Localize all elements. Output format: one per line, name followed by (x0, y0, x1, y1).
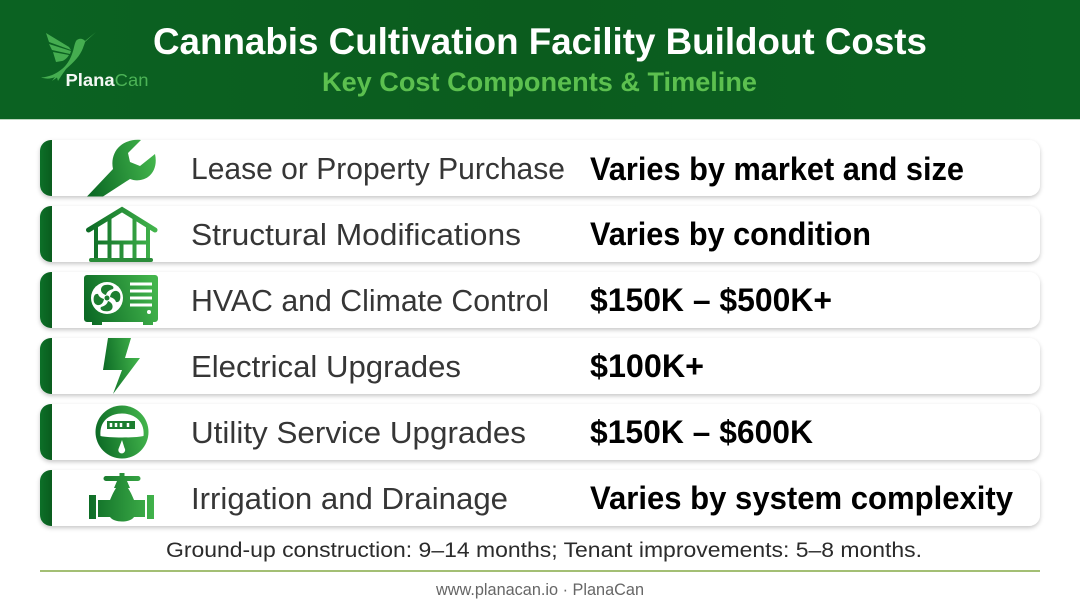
value: $150K – $500K+ (590, 282, 832, 318)
subtitle: Key Cost Components & Timeline (322, 67, 757, 97)
value: $150K – $600K (590, 414, 813, 450)
icon: lightning bolt (103, 338, 140, 394)
title: Cannabis Cultivation Facility Buildout Costs (153, 21, 927, 62)
label: HVAC and Climate Control (191, 283, 549, 318)
panel: utility (40, 404, 1040, 460)
icon: hvac unit (84, 275, 158, 325)
value: Varies by market and size (590, 151, 964, 187)
icon: hummingbird (41, 32, 96, 81)
panel: electrical (40, 338, 1040, 394)
icon: utility meter (96, 406, 148, 458)
timeline note: Ground-up construction: 9–14 months; Tenant improvements: 5–8 months. (166, 538, 922, 562)
label: Structural Modifications (191, 217, 521, 252)
panel: hvac (40, 272, 1040, 328)
label: Irrigation and Drainage (191, 481, 508, 516)
icon: wrench (87, 140, 156, 196)
value: Varies by system complexity (590, 480, 1013, 516)
label: Electrical Upgrades (191, 349, 461, 384)
logo (41, 32, 148, 90)
wordmark: PlanaCan (66, 70, 148, 90)
panel: lease or property purchase (40, 140, 1040, 196)
footer: www.planacan.io · PlanaCan (435, 581, 644, 599)
value: Varies by condition (590, 216, 871, 252)
value: $100K+ (590, 348, 704, 384)
panel: structural modifications (40, 206, 1040, 262)
label: Lease or Property Purchase (191, 151, 565, 186)
icon: house frame (88, 210, 155, 262)
panel: irrigation (40, 470, 1040, 526)
header band (0, 0, 1080, 120)
icon: pipe valve (89, 473, 154, 522)
label: Utility Service Upgrades (191, 415, 526, 450)
